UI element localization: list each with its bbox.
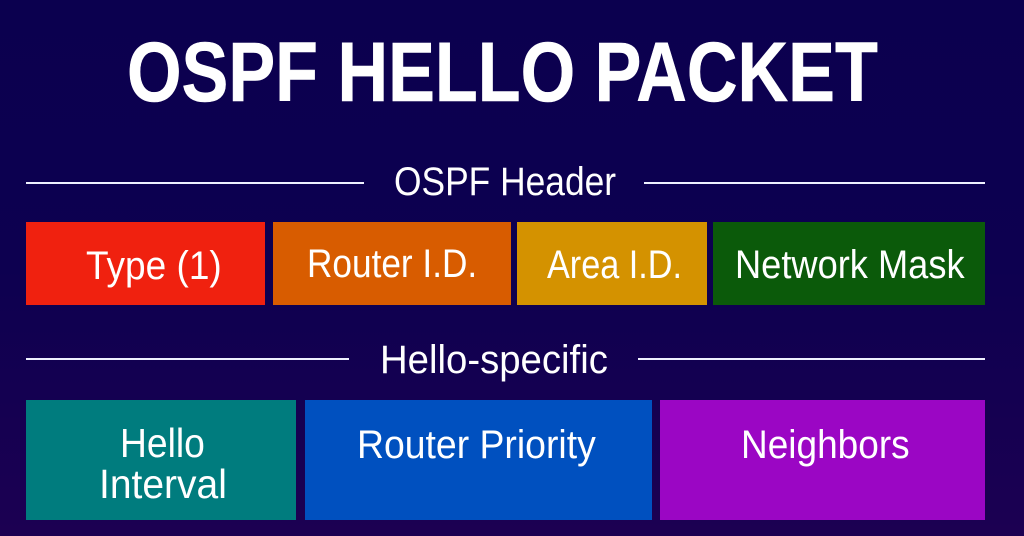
- field: Hello Interval: Hello: [120, 420, 205, 466]
- heading: Hello-specific: Hello-specific: [380, 338, 608, 382]
- field: Type (1): Type (1): [86, 244, 222, 288]
- title: OSPF HELLO PACKET: [127, 25, 878, 119]
- field: Neighbors: Neighbors: [741, 423, 910, 467]
- field: Area I.D.: [517, 222, 707, 305]
- field: Network Mask: Network Mask: [735, 243, 965, 287]
- field: Hello Interval: [26, 400, 296, 520]
- field: Router Priority: [305, 400, 652, 520]
- field: Network Mask: [713, 222, 985, 305]
- field: Neighbors: [660, 400, 985, 520]
- panel: hello fields row: [26, 400, 985, 520]
- field: Router I.D.: [273, 222, 511, 305]
- panel: header fields row: [26, 222, 985, 305]
- field: Router I.D.: Router I.D.: [307, 242, 477, 286]
- field: Hello Interval: Interval: [99, 461, 227, 507]
- field: Area I.D.: Area I.D.: [547, 243, 682, 287]
- field: Type (1): [26, 222, 265, 305]
- field: Router Priority: Router Priority: [357, 423, 596, 467]
- heading: OSPF Header: OSPF Header: [394, 160, 616, 204]
